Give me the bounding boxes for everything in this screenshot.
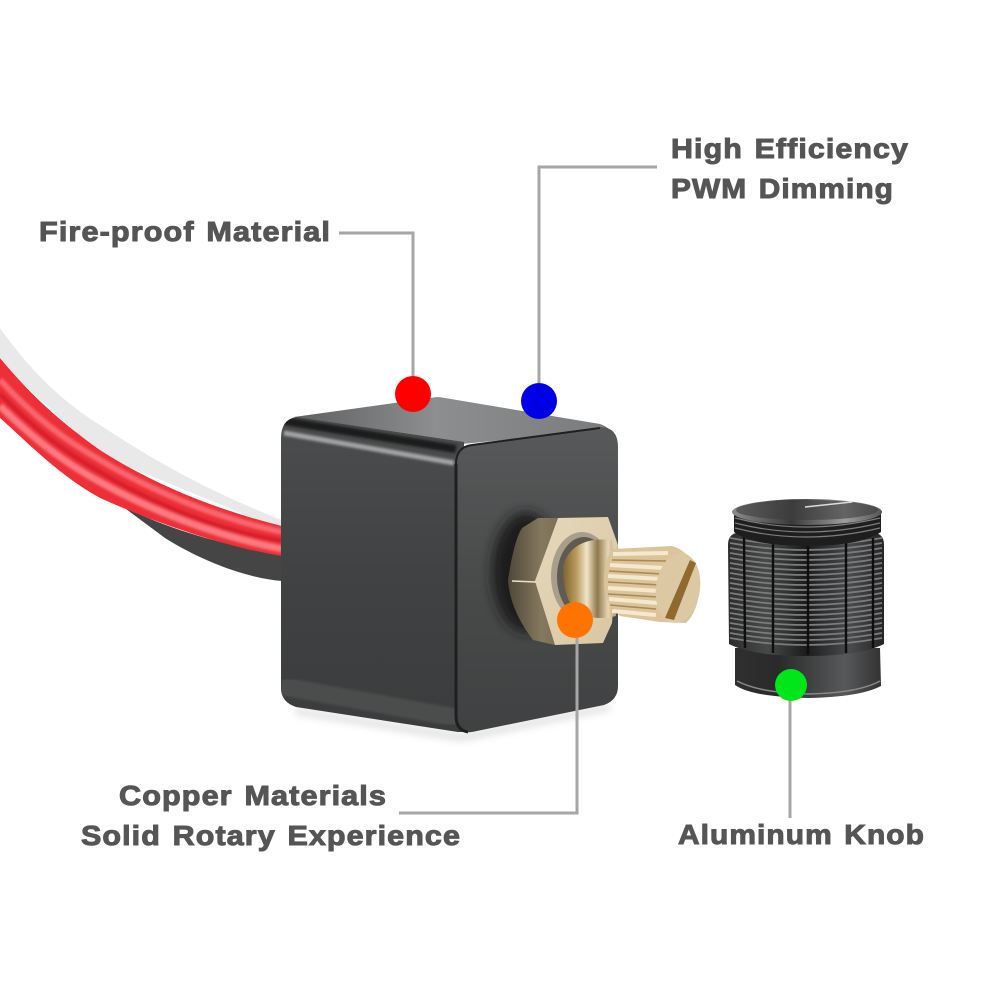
red wires: [0, 358, 282, 556]
cable bundle: [0, 328, 282, 581]
mounting recess: [492, 512, 560, 632]
callout: copper materials: Copper Materials: [119, 780, 387, 811]
dimmer housing: [281, 397, 618, 741]
left face: [281, 417, 464, 732]
nut side: [508, 518, 575, 645]
aluminum knob: [728, 499, 884, 698]
knob grip: [728, 533, 884, 656]
callout: PWM dimming: [521, 133, 909, 419]
shaft end with slot: [651, 550, 705, 626]
knob base: [735, 648, 881, 698]
callout: aluminum knob: Aluminum Knob: [678, 819, 925, 850]
nut face: [535, 517, 618, 645]
front face: [456, 427, 618, 732]
knob top cap: [732, 499, 882, 525]
callout: fire-proof material: [39, 216, 431, 412]
brass shaft and nut: [508, 517, 705, 645]
callout: aluminum knob: [678, 669, 925, 850]
left face edge bands: [281, 421, 458, 718]
splined shaft: [604, 546, 700, 623]
white ribbon: [0, 328, 282, 530]
shaft neck: [563, 540, 616, 618]
knob neck: [734, 512, 881, 546]
callout: fire-proof material: Fire-proof Material: [39, 216, 331, 247]
callout: copper materials: [81, 602, 593, 851]
shadow: [295, 704, 610, 741]
infographic canvas: [0, 138, 924, 852]
top face: [294, 397, 610, 444]
nut bore: [551, 532, 613, 620]
callout: copper materials: Solid Rotary Experience: [81, 820, 461, 851]
callout: PWM dimming: PWM Dimming: [671, 173, 894, 204]
black wire: [122, 506, 282, 581]
callout: PWM dimming: High Efficiency: [671, 133, 909, 164]
